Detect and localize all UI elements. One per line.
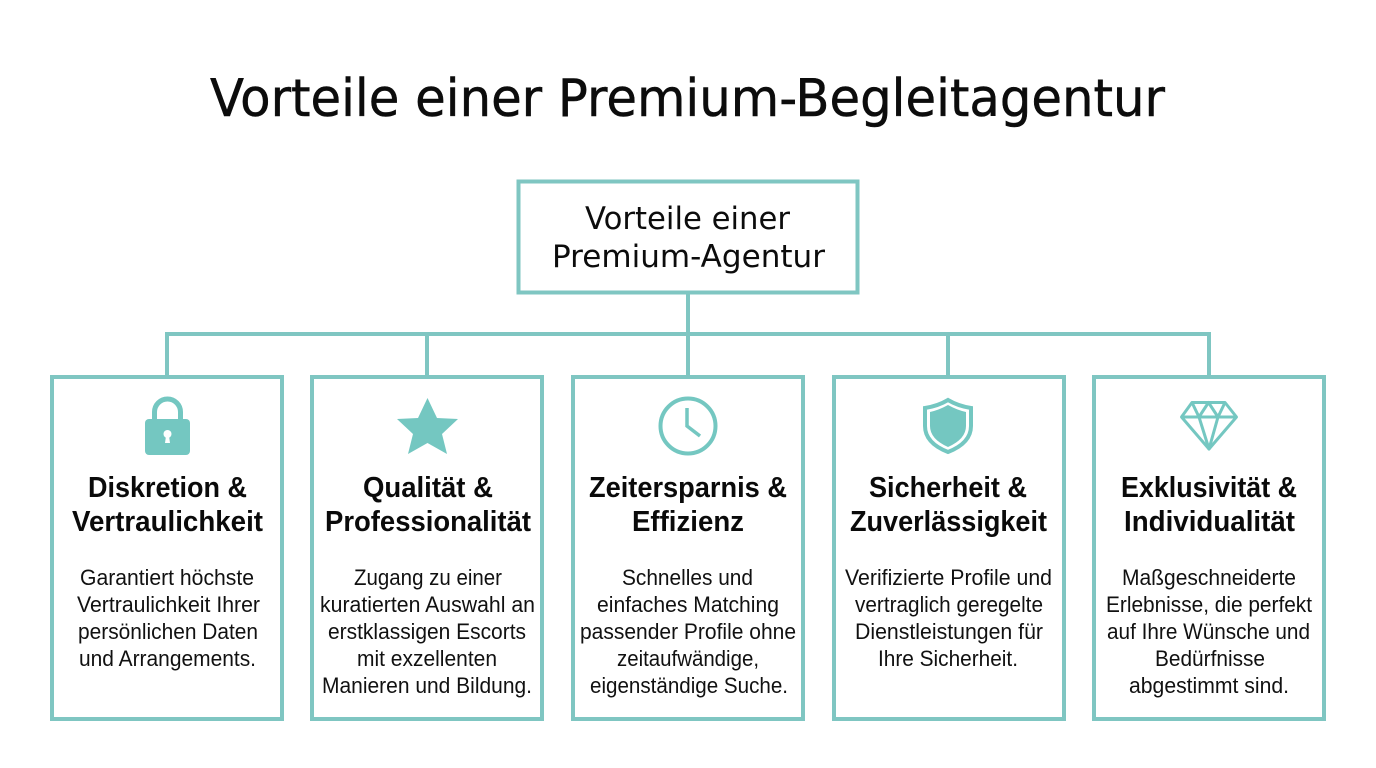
- title: Vorteile einer Premium-Begleitagentur: [210, 69, 1166, 129]
- heading: [589, 472, 787, 538]
- description: einfaches Matching: [597, 592, 779, 617]
- description: [320, 565, 535, 698]
- panel: root box: [518, 182, 858, 292]
- description: eigenständige Suche.: [590, 673, 788, 698]
- description: auf Ihre Wünsche und: [1107, 619, 1310, 644]
- heading: [1121, 472, 1297, 538]
- root box text: Premium-Agentur: [552, 239, 825, 275]
- description: Vertraulichkeit Ihrer: [77, 592, 260, 617]
- description: Garantiert höchste: [80, 565, 254, 590]
- description: Ihre Sicherheit.: [878, 646, 1018, 671]
- description: [580, 565, 796, 698]
- description: [77, 565, 260, 671]
- heading: Sicherheit &: [869, 472, 1027, 504]
- panel: Zeitersparnis: [573, 377, 803, 719]
- icon: lock: [145, 399, 190, 455]
- icon: clock: [660, 398, 716, 454]
- heading: Effizienz: [632, 506, 744, 538]
- root box text: [552, 201, 825, 275]
- description: und Arrangements.: [79, 646, 256, 671]
- connector lines: [167, 294, 1209, 375]
- icon: star: [397, 398, 458, 454]
- description: Zugang zu einer: [354, 565, 502, 590]
- description: vertraglich geregelte: [855, 592, 1043, 617]
- heading: Exklusivität &: [1121, 472, 1297, 504]
- description: Erlebnisse, die perfekt: [1106, 592, 1312, 617]
- description: Verifizierte Profile und: [845, 565, 1052, 590]
- description: Bedürfnisse: [1155, 646, 1265, 671]
- description: [1106, 565, 1312, 698]
- description: Manieren und Bildung.: [322, 673, 532, 698]
- description: mit exzellenten: [357, 646, 497, 671]
- description: zeitaufwändige,: [617, 646, 759, 671]
- description: Schnelles und: [622, 565, 753, 590]
- icon: shield: [925, 400, 971, 452]
- description: Maßgeschneiderte: [1122, 565, 1296, 590]
- panel: Sicherheit: [834, 377, 1064, 719]
- heading: Individualität: [1124, 506, 1295, 538]
- description: persönlichen Daten: [78, 619, 258, 644]
- description: abgestimmt sind.: [1129, 673, 1289, 698]
- heading: Vertraulichkeit: [72, 506, 263, 538]
- description: passender Profile ohne: [580, 619, 796, 644]
- description: Dienstleistungen für: [855, 619, 1043, 644]
- heading: Diskretion &: [88, 472, 247, 504]
- heading: Professionalität: [325, 506, 531, 538]
- panel: Qualität: [312, 377, 542, 719]
- description: [845, 565, 1052, 671]
- heading: [72, 472, 263, 538]
- heading: [850, 472, 1047, 538]
- heading: [325, 472, 531, 538]
- panel: Exklusivität: [1094, 377, 1324, 719]
- panel: Diskretion: [52, 377, 282, 719]
- icon: diamond: [1182, 402, 1236, 449]
- description: erstklassigen Escorts: [328, 619, 526, 644]
- heading: Zuverlässigkeit: [850, 506, 1047, 538]
- heading: Zeitersparnis &: [589, 472, 787, 504]
- root box text: Vorteile einer: [585, 201, 790, 237]
- heading: Qualität &: [363, 472, 493, 504]
- description: kuratierten Auswahl an: [320, 592, 535, 617]
